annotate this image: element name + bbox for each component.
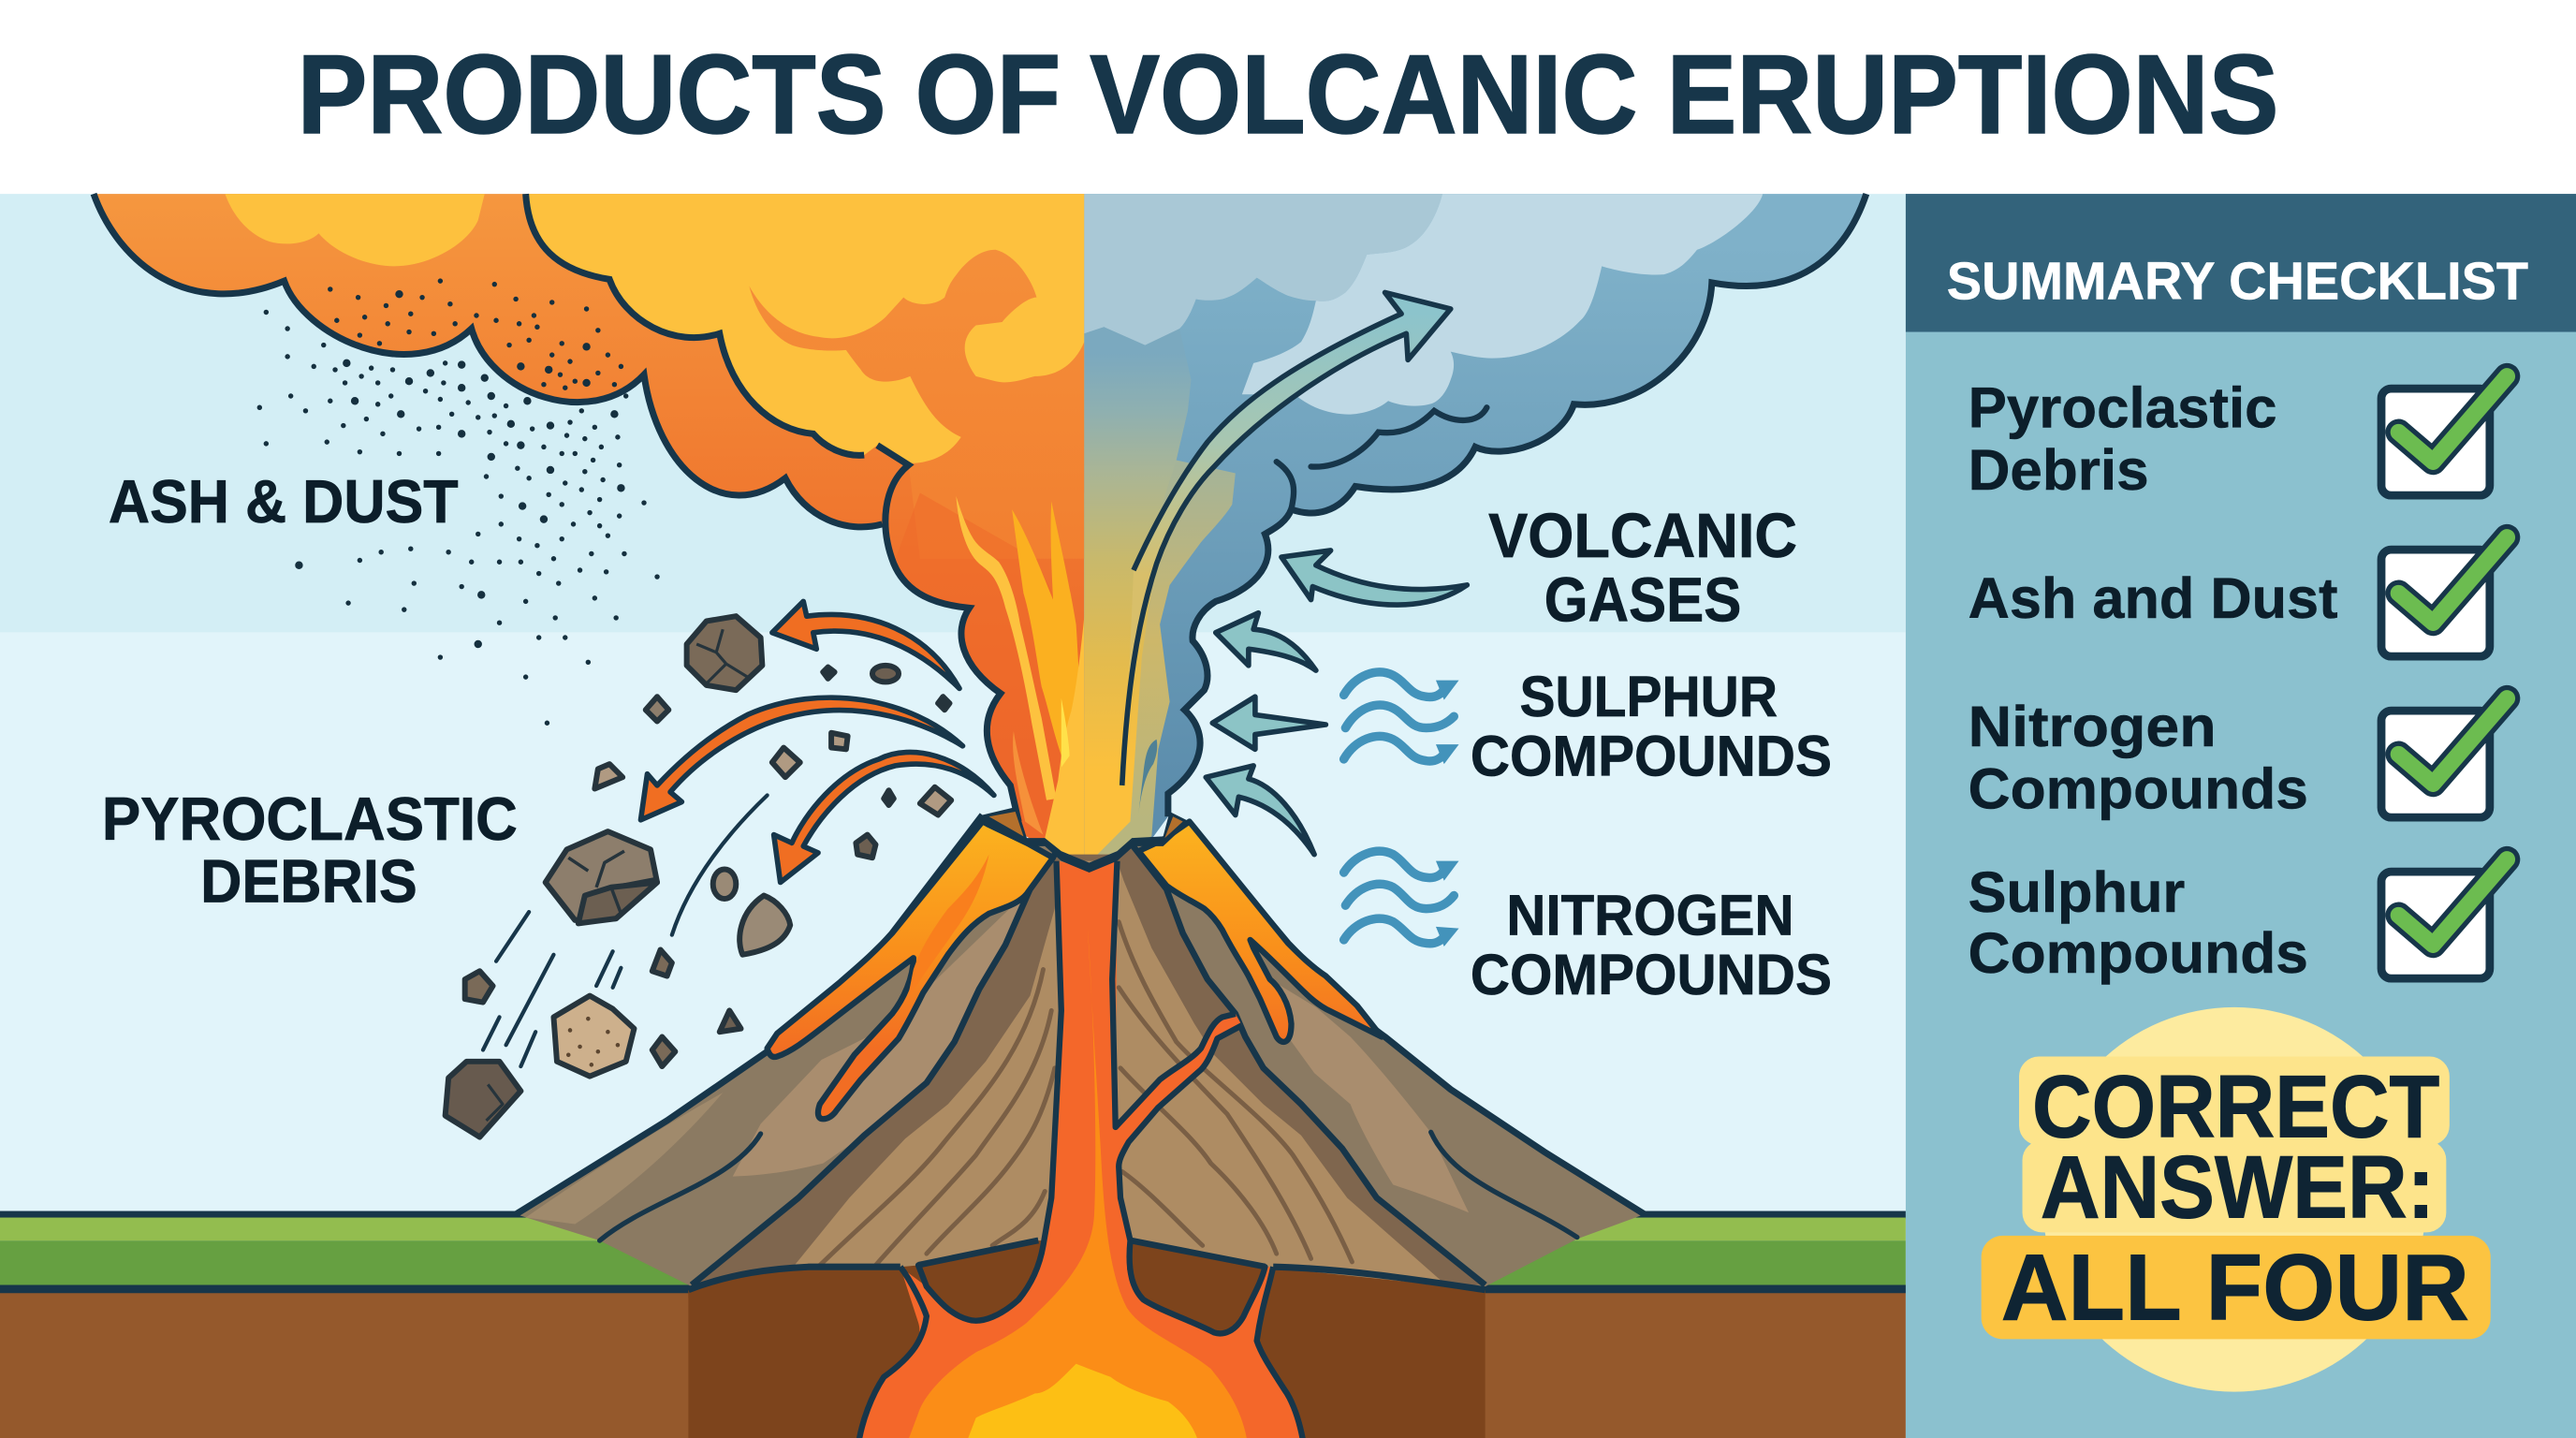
label: ash and dust: ASH & DUST [109,467,459,536]
light billow [1242,194,1763,415]
yellow cloud [526,194,1084,463]
item: nitrogen compounds [1969,695,2308,822]
stem lower tone [894,493,1084,871]
stem outline [877,446,1018,822]
right lava flow [1138,822,1382,1042]
arrow: lower debris arc [774,752,994,883]
arrow: main rising gas [1122,292,1451,785]
wavy gas lines: sulphur [1344,672,1459,764]
pale orange billow patch [749,250,1084,559]
checklist header [1906,194,2576,332]
label: volcanic gases: GASES [1544,565,1741,635]
yellow cloud outline [526,194,864,455]
lava flows [768,807,1382,1119]
yellow patch in left cloud [225,194,485,266]
label: volcanic gases: VOLCANIC [1488,502,1797,571]
arrow: upper debris arc [772,601,959,688]
wavy gas lines: nitrogen [1344,851,1459,946]
left lava flow [768,822,1053,1119]
checkbox 3 [2381,698,2507,817]
label: pyroclastic debris: PYROCLASTIC [102,785,518,853]
central body [692,844,1486,1285]
volcanic debris rocks [446,616,951,1137]
ash and dust particles [259,281,657,723]
label: sulphur compounds: COMPOUNDS [1471,724,1832,788]
arrow: middle debris arc [640,697,962,820]
label: volcanic gases [1488,502,1797,635]
cloud outline [94,194,882,527]
callout: correct answer: ANSWER: [2041,1138,2435,1238]
cone outline [516,815,1645,1214]
header band [0,0,2576,194]
ground [0,1211,1906,1438]
label: nitrogen compounds [1471,884,1832,1007]
checkbox 4 [2381,859,2507,978]
item: pyroclastic debris: Debris [1969,438,2149,503]
mid magma [909,927,1247,1438]
teal gas arrows [1122,292,1467,855]
flank crack lines [600,1132,1577,1240]
flames [1012,501,1080,764]
rock: top boulder [687,616,762,690]
gas cloud: blue half [1084,194,1866,868]
arrow: gas a [1281,550,1467,605]
arrow: gas c [1212,697,1325,749]
item: sulphur compounds: Sulphur [1969,860,2185,925]
item: ash and dust: Ash and Dust [1969,566,2338,631]
crater rim [983,807,1190,873]
label: sulphur compounds [1471,665,1832,788]
item: pyroclastic debris [1969,375,2277,503]
label: pyroclastic debris: DEBRIS [200,847,417,916]
title: PRODUCTS OF VOLCANIC ERUPTIONS [298,33,2278,157]
darker grey-blue top billow [1084,194,1442,345]
stem colour blend [1084,460,1236,868]
item: nitrogen compounds: Nitrogen [1969,695,2217,759]
outer flank [516,815,1645,1286]
label: nitrogen compounds: COMPOUNDS [1471,943,1832,1007]
label: sulphur compounds: SULPHUR [1519,665,1778,729]
callout: correct answer: ALL FOUR [2001,1235,2469,1340]
gas cloud outline [1168,194,1866,816]
checklist heading: SUMMARY CHECKLIST [1947,251,2528,310]
checkbox 1 [2381,376,2507,495]
hot core [968,1364,1197,1438]
small rocks [465,666,951,1066]
label: nitrogen compounds: NITROGEN [1506,884,1794,948]
magma conduit and chamber [859,861,1303,1438]
underground rock pockets and crust [688,1240,1486,1299]
item: sulphur compounds: Compounds [1969,921,2308,986]
debris motion lines [483,795,768,1066]
callout: correct answer [1982,1007,2491,1392]
label: pyroclastic debris [102,785,518,916]
sky background [0,194,1906,1218]
rock: dark lower boulder [446,1062,520,1137]
item: sulphur compounds [1969,860,2308,986]
arrow: gas d [1206,766,1314,855]
rock: large boulder [546,831,657,923]
item: nitrogen compounds: Compounds [1969,757,2308,822]
orange debris arrows [640,601,994,883]
inner ridge lines [692,844,1486,1285]
panel: summary checklist [1906,194,2576,1438]
callout: correct answer: CORRECT [2032,1058,2439,1157]
strata lines [818,922,1352,1267]
arrow: gas b [1216,613,1316,670]
eruption column and ash cloud: orange half [94,194,1084,871]
item: pyroclastic debris: Pyroclastic [1969,375,2277,440]
drip [1138,740,1157,814]
inner billow lines [1277,407,1486,509]
volcano cone [516,815,1645,1286]
light flank patches [733,889,1030,1177]
conduit outlines [859,861,1303,1438]
left flow inner stripe [907,855,989,1003]
dark pockets [918,1240,1039,1321]
rock: speckled pumice [553,996,634,1077]
checkbox 2 [2381,537,2507,656]
